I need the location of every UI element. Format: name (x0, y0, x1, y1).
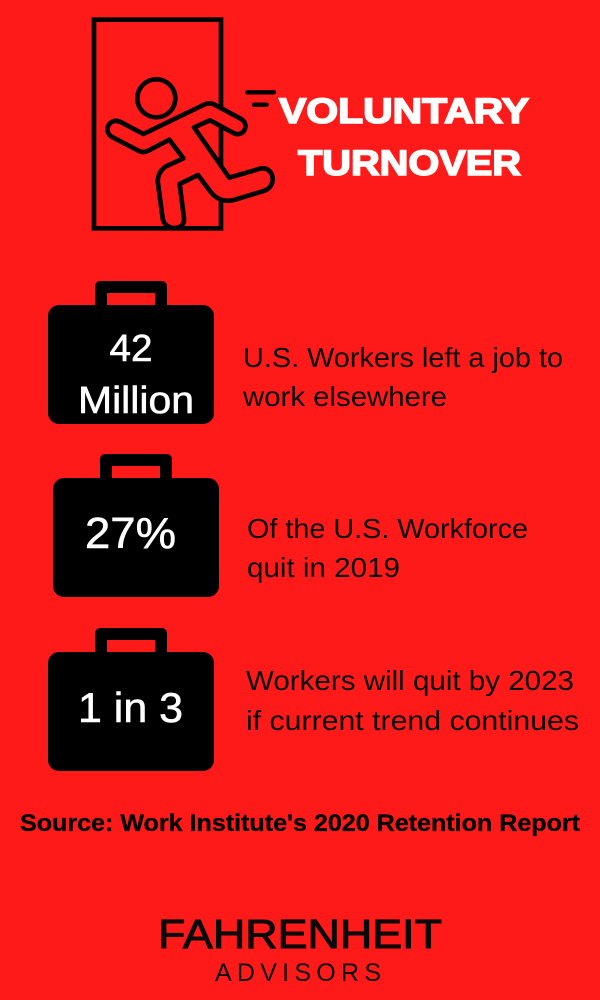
icon: person running out of door (94, 20, 274, 228)
text: U.S. workers left (242, 342, 563, 412)
icon: runner head (137, 79, 175, 117)
logo: Fahrenheit Advisors: ADVISORS (215, 959, 381, 987)
text: U.S. workers left: work elsewhere (242, 381, 447, 412)
icon: speed lines (247, 92, 274, 105)
text: U.S. workers left: U.S. Workers left a job to (243, 342, 563, 373)
icon: runner body (107, 103, 273, 228)
briefcase: 42 Million: 42 (110, 328, 152, 370)
title: TURNOVER (298, 144, 521, 183)
text: workforce quit: quit in 2019 (247, 552, 400, 583)
text: workers will quit: if current trend continues (246, 705, 579, 736)
logo: Fahrenheit Advisors (158, 911, 442, 987)
briefcase: 27%: 27% (85, 509, 176, 558)
text: workforce quit (247, 513, 528, 583)
briefcase: 42 Million (48, 281, 214, 424)
source line: Source: Work Institute's 2020 Retention Report (20, 810, 580, 837)
text: workers will quit (246, 665, 579, 736)
briefcase: 1 in 3 (48, 628, 214, 771)
briefcase: 1 in 3: 1 in 3 (78, 684, 183, 731)
title: VOLUNTARY (279, 92, 529, 131)
briefcase: 42 Million: Million (78, 380, 194, 422)
icon: door (94, 20, 221, 228)
briefcase: 27% (53, 454, 219, 597)
text: workers will quit: Workers will quit by 2023 (246, 665, 574, 696)
text: workforce quit: Of the U.S. Workforce (247, 513, 528, 544)
logo: Fahrenheit Advisors: FAHRENHEIT (158, 911, 442, 957)
title (279, 92, 529, 183)
